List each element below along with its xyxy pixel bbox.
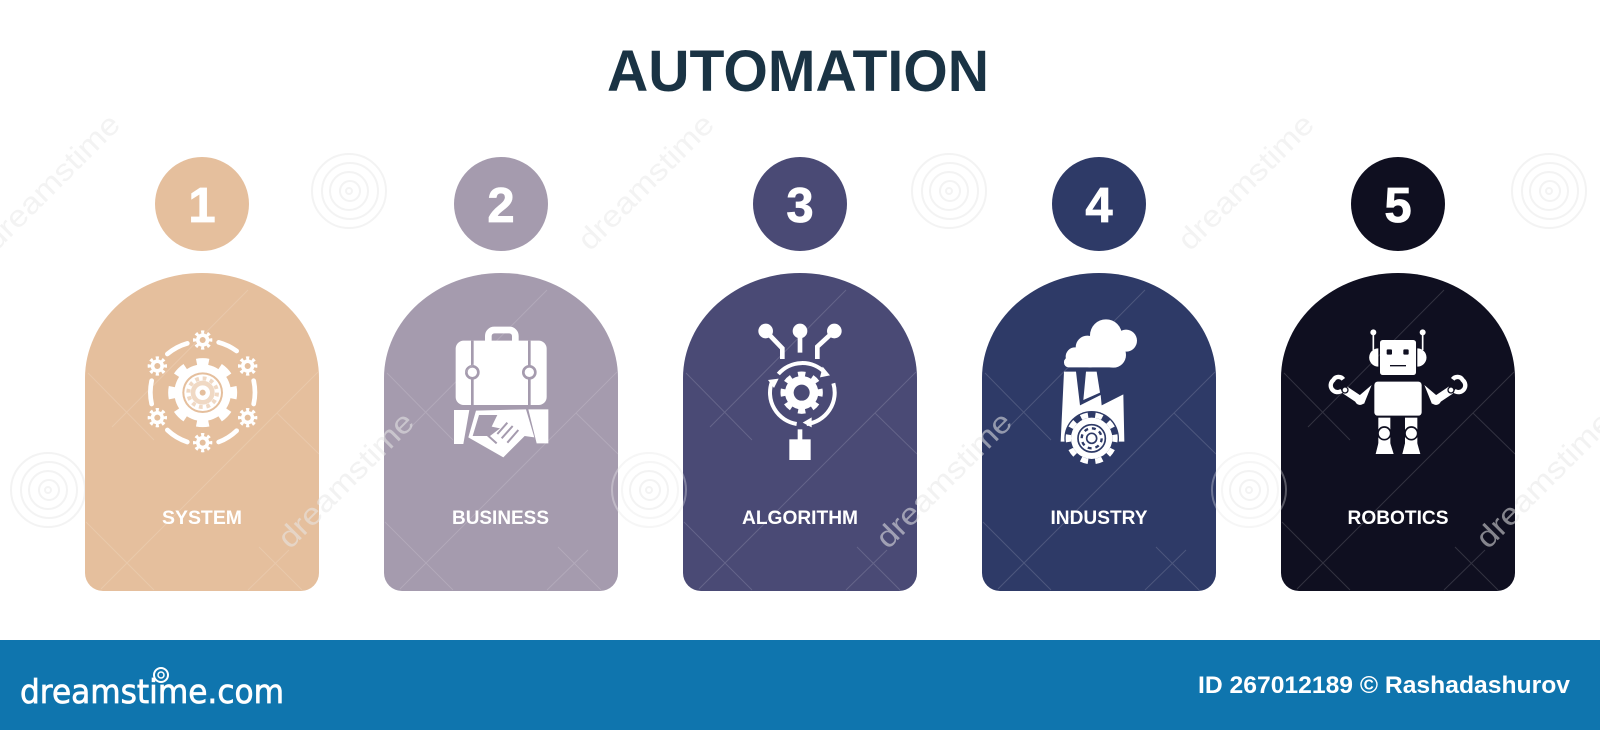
footer logo: dreamstime.com bbox=[20, 672, 284, 711]
label: industry: INDUSTRY bbox=[1050, 508, 1148, 529]
card 3 bbox=[683, 273, 917, 591]
number badge 2: 2 bbox=[487, 179, 515, 233]
footer band bbox=[0, 640, 1600, 730]
card 1 bbox=[85, 273, 319, 591]
label: business: BUSINESS bbox=[452, 508, 549, 529]
number badge 4: 4 bbox=[1085, 179, 1113, 233]
label: algorithm: ALGORITHM bbox=[742, 508, 858, 529]
icon: network of gears bbox=[149, 332, 256, 451]
watermark spirals and text bbox=[0, 108, 1586, 527]
watermark lines and overlays on cards: dreamstime bbox=[272, 406, 421, 555]
title: AUTOMATION bbox=[607, 39, 989, 104]
step 3: algorithm bbox=[683, 157, 917, 591]
number badge 3: 3 bbox=[786, 179, 814, 233]
number badge 5 bbox=[1351, 157, 1445, 251]
step 1: system bbox=[85, 157, 319, 591]
watermark lines and overlays on cards bbox=[86, 290, 1600, 590]
number badge 2 bbox=[454, 157, 548, 251]
number badge 4 bbox=[1052, 157, 1146, 251]
icon: algorithm gear flow bbox=[758, 324, 842, 460]
footer image id and author: ID 267012189 © Rashadashurov bbox=[1198, 672, 1570, 699]
number badge 3 bbox=[753, 157, 847, 251]
step 2: business bbox=[384, 157, 618, 591]
card 4 bbox=[982, 273, 1216, 591]
step 4: industry bbox=[982, 157, 1216, 591]
label: robotics: ROBOTICS bbox=[1348, 508, 1448, 529]
step 5: robotics bbox=[1281, 157, 1515, 591]
number badge 1: 1 bbox=[188, 179, 216, 233]
label: system: SYSTEM bbox=[162, 508, 242, 529]
watermark spirals and text: dreamstime bbox=[572, 108, 721, 257]
icon: factory with cloud and gear bbox=[1061, 319, 1137, 466]
watermark lines and overlays on cards: dreamstime bbox=[1470, 406, 1600, 555]
number badge 5: 5 bbox=[1384, 179, 1412, 233]
icon: robot bbox=[1331, 329, 1465, 454]
number badge 1 bbox=[155, 157, 249, 251]
card 2 bbox=[384, 273, 618, 591]
watermark spirals and text: dreamstime bbox=[1172, 108, 1321, 257]
icon: briefcase and handshake bbox=[454, 330, 548, 457]
watermark lines and overlays on cards: dreamstime bbox=[870, 406, 1019, 555]
card 5 bbox=[1281, 273, 1515, 591]
